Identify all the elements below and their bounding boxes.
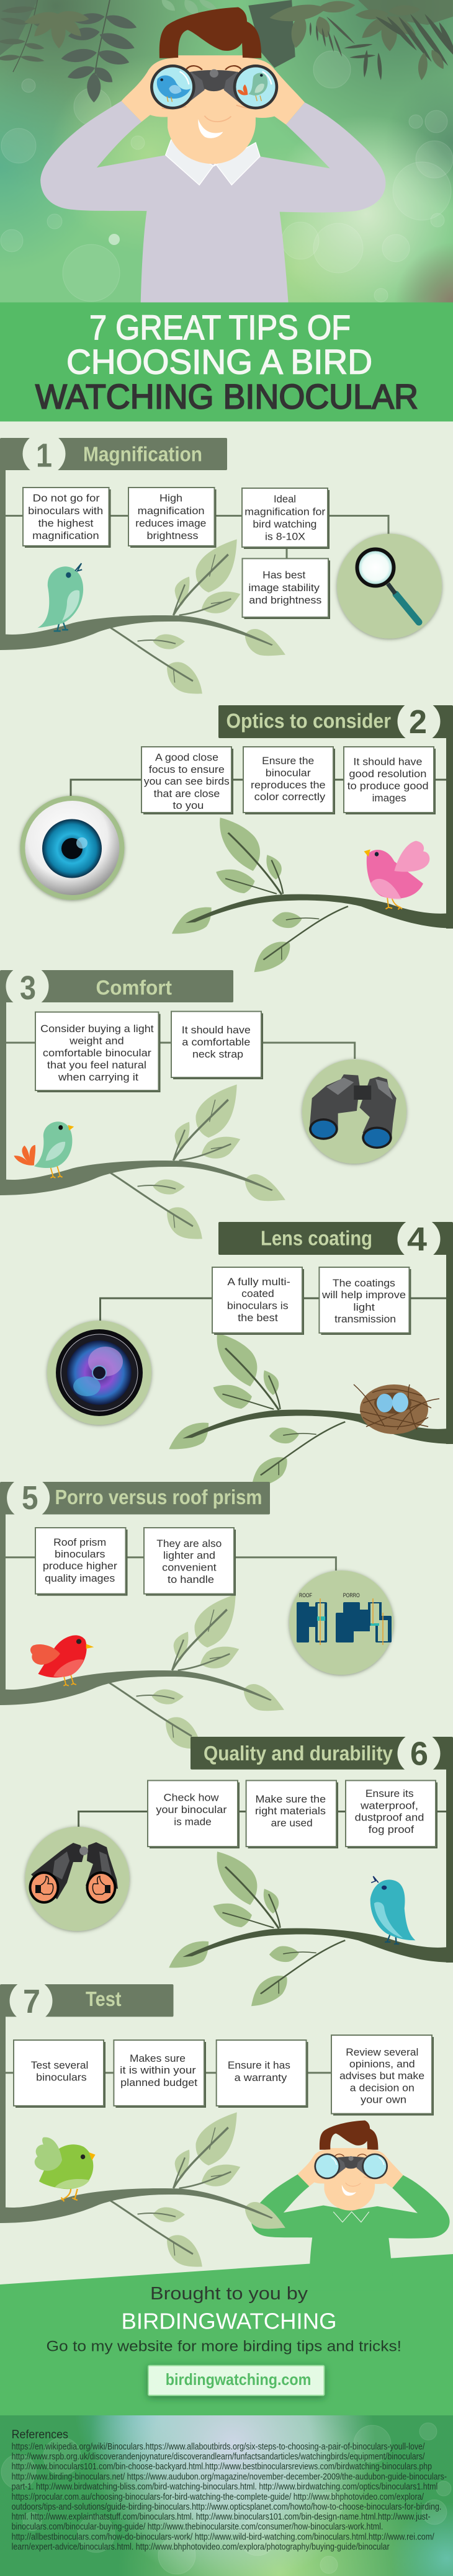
section 1: magnification — [0, 432, 442, 693]
tip box: ideal magnification: is 8-10X — [265, 530, 305, 542]
tip box: highest magnification: binoculars with — [28, 505, 103, 517]
tip box: materials: Make sure the — [256, 1793, 326, 1805]
branch with leaves — [0, 1084, 285, 1239]
section 5 heading — [0, 1476, 270, 1695]
small birdwatcher in green sweater — [251, 2120, 450, 2290]
tip box: opinions: advises but make — [339, 2070, 424, 2082]
section 5 heading: Porro versus roof prism — [55, 1486, 262, 1509]
tip box: roof prism: produce higher — [43, 1560, 117, 1572]
tip box: warranty: Ensure it has — [228, 2059, 290, 2071]
tip box: waterproof: fog proof — [369, 1824, 414, 1835]
tip box: resolution: to produce good — [348, 780, 429, 791]
section 7 heading: Test — [86, 1987, 122, 2010]
section 6 heading: Quality and durability — [204, 1742, 393, 1765]
icon: binoculars with thumbs up — [25, 1827, 129, 1931]
tip box: test several — [14, 2040, 105, 2108]
icon: teal bird — [370, 1876, 415, 1945]
tip box: highest magnification: the highest — [38, 517, 94, 529]
icon: mint bird — [38, 563, 83, 631]
section 4 heading — [218, 1218, 453, 1444]
references panel: learn/expert-advice/binoculars.html. http://www.bhphotovideo.com/explora/photography/buying-guide/binocular — [12, 2543, 390, 2552]
tip box: multi-coated: the best — [238, 1312, 278, 1324]
section 7 heading: 7 — [23, 1983, 40, 2020]
tip box: colour reproduction: Ensure the — [262, 755, 314, 767]
section 1 heading: 1 — [36, 437, 52, 474]
tip box: opinions — [331, 2035, 434, 2116]
references panel: binoculars.com/binocular-buying-guide/ http://www.thebinocularsite.com/consumer/how-binoculars-work.html. — [12, 2522, 383, 2532]
icon: roof and porro prism diagram: PORRO — [343, 1592, 360, 1598]
section 5 heading: 5 — [22, 1479, 38, 1517]
section 1 heading — [0, 432, 227, 642]
tip box: stability: image stability — [248, 582, 320, 594]
tip box: ideal magnification: bird watching — [253, 519, 316, 530]
icon: magnifying glass — [337, 533, 442, 639]
tip box: how it is made: your binocular — [156, 1804, 227, 1816]
tip box: waterproof — [346, 1780, 437, 1848]
references panel: References — [12, 2428, 68, 2441]
footer text: brought to you by: Brought to you by — [150, 2284, 308, 2304]
section 5 connectors — [6, 1558, 336, 1571]
footer text: brought to you by: BIRDINGWATCHING — [122, 2309, 336, 2333]
tip box: light weight: Consider buying a light — [40, 1023, 154, 1035]
footer text: brought to you by: Go to my website for more birding tips and tricks! — [46, 2338, 401, 2355]
tip box: close focus: A good close — [155, 752, 218, 763]
tip box: stability — [242, 558, 330, 619]
icon: green bird with orange tail — [14, 1121, 74, 1178]
section 1 heading: Magnification — [83, 442, 202, 465]
tip box: waterproof: Ensure its — [366, 1788, 414, 1799]
tip box: neck strap: It should have — [182, 1024, 251, 1036]
tip box: close focus: to you — [173, 800, 204, 811]
section 1 connectors — [6, 516, 388, 558]
tip box: lighter: They are also — [156, 1538, 222, 1549]
tip box: how it is made: is made — [174, 1816, 212, 1827]
branch with leaves — [0, 539, 285, 693]
footer green band — [0, 2254, 453, 2415]
section 2 heading — [218, 700, 453, 929]
icon: roof and porro prism diagram — [289, 1571, 393, 1675]
icon: lime bird — [35, 2137, 96, 2201]
tip box: neck strap: neck strap — [192, 1048, 243, 1060]
branch with leaves — [169, 1333, 450, 1487]
tip box: lighter: to handle — [168, 1574, 214, 1585]
tip box: opinions: Review several — [346, 2046, 418, 2058]
section 6 connectors — [79, 1811, 446, 1827]
tip box: image brightness: reduces image — [135, 517, 206, 529]
tip box: light transmission — [319, 1267, 411, 1335]
tip box: budget: planned budget — [120, 2077, 197, 2088]
tip box: image brightness: High — [159, 492, 182, 504]
section 2 heading: Optics to consider — [226, 710, 391, 732]
tip box: waterproof: waterproof, — [360, 1800, 418, 1811]
tip box: light transmission: The coatings — [333, 1277, 395, 1289]
tip box: budget: Makes sure — [130, 2052, 186, 2064]
hero illustration: birdwatcher with binoculars — [0, 0, 453, 303]
section 6 heading: 6 — [410, 1736, 428, 1773]
tip box: close focus: focus to ensure — [149, 764, 225, 775]
tip box: ideal magnification — [242, 488, 330, 549]
section 2 heading: 2 — [409, 703, 427, 741]
tip box: opinions: a decision on — [350, 2082, 415, 2094]
tip box: opinions: opinions, and — [349, 2058, 415, 2070]
tip box: light weight: that you feel natural — [47, 1059, 146, 1071]
section 4: lens coating — [47, 1218, 453, 1487]
tip box: highest magnification: Do not go for — [33, 492, 100, 504]
tip box: neck strap: a comfortable — [182, 1036, 250, 1048]
section 5: porro versus roof prism — [0, 1476, 393, 1749]
tip box: light transmission: light — [353, 1301, 375, 1313]
tip box: test several: binoculars — [36, 2071, 87, 2083]
tip box: multi-coated: binoculars is — [227, 1300, 289, 1312]
tip box: multi-coated — [212, 1267, 304, 1335]
branch with leaves — [0, 1594, 284, 1749]
website button: birdingwatching.com — [166, 2370, 311, 2389]
tip box: light weight: weight and — [69, 1035, 124, 1047]
section 6: quality and durability — [25, 1732, 453, 2006]
tip box: close focus — [141, 747, 233, 814]
tip box: light weight: when carrying it — [58, 1071, 138, 1083]
tip box: lighter: lighter and — [163, 1549, 215, 1561]
title banner: 7 GREAT TIPS OF — [89, 308, 351, 347]
section 4 heading: 4 — [407, 1221, 427, 1258]
branch with leaves — [172, 818, 453, 972]
tip box: test several: Test several — [31, 2059, 88, 2071]
tip box: close focus: you can see birds — [144, 775, 230, 787]
section 7 heading — [0, 1979, 174, 2209]
tip box: warranty: a warranty — [235, 2072, 287, 2084]
tip box: light transmission: will help improve — [321, 1289, 406, 1301]
title banner: CHOOSING A BIRD — [66, 342, 372, 381]
tip box: image brightness — [128, 488, 216, 548]
icon: binoculars — [302, 1059, 406, 1164]
icon: eye — [20, 796, 124, 900]
tip box: light weight: comfortable binocular — [43, 1047, 151, 1059]
tip box: materials: right materials — [255, 1805, 326, 1817]
tip box: materials: are used — [271, 1817, 313, 1829]
tip box: colour reproduction: binocular — [266, 767, 311, 779]
tip box: highest magnification — [23, 488, 110, 548]
tip box: resolution: It should have — [353, 756, 422, 768]
tip box: opinions: your own — [361, 2094, 406, 2106]
references panel — [0, 2415, 453, 2576]
section 2 connectors — [71, 780, 446, 796]
tip box: how it is made: Check how — [164, 1792, 219, 1804]
tip box: multi-coated: coated — [241, 1288, 274, 1299]
footer text: brought to you by — [46, 2284, 401, 2355]
section 6 heading — [191, 1732, 453, 1963]
tip box: highest magnification: magnification — [32, 530, 99, 541]
tip box: roof prism: Roof prism — [53, 1536, 106, 1548]
website button — [148, 2366, 324, 2396]
tip box: colour reproduction: reproduces the — [251, 779, 326, 791]
tip box: stability: and brightness — [249, 594, 321, 606]
tip box: neck strap — [171, 1012, 263, 1079]
tip box: budget: it is within your — [120, 2064, 196, 2076]
title banner — [0, 303, 453, 422]
tip box: light transmission: transmission — [334, 1313, 396, 1325]
icon: roof and porro prism diagram: ROOF — [299, 1592, 312, 1598]
tip box: colour reproduction — [243, 747, 335, 814]
tip box: how it is made — [148, 1780, 240, 1848]
section 7: test — [0, 1979, 434, 2266]
tip box: lighter: convenient — [162, 1562, 217, 1574]
tip box: warranty — [217, 2040, 308, 2108]
section 4 heading: Lens coating — [261, 1227, 372, 1250]
tip box: multi-coated: A fully multi- — [227, 1276, 290, 1288]
tip box: stability: Has best — [262, 569, 305, 581]
tip box: waterproof: dustproof and — [355, 1812, 424, 1824]
tip box: light weight — [35, 1012, 160, 1092]
tip box: lighter — [144, 1528, 236, 1596]
tip box: budget — [114, 2040, 206, 2108]
section 7 connectors — [6, 2072, 331, 2074]
icon: pink bird — [364, 841, 429, 909]
tip box: roof prism — [35, 1528, 128, 1596]
tip box: roof prism: binoculars — [55, 1548, 105, 1560]
tip box: resolution: good resolution — [349, 768, 426, 780]
branch with leaves — [169, 1852, 450, 2006]
section 2: optics — [20, 700, 453, 972]
branch with leaves — [0, 2112, 285, 2266]
section 3 heading — [0, 965, 233, 1186]
tip box: ideal magnification: Ideal — [274, 493, 296, 505]
tip box: image brightness: brightness — [146, 530, 199, 541]
section 3 heading: 3 — [20, 969, 36, 1007]
icon: nest with blue eggs — [354, 1384, 439, 1434]
tip box: resolution — [344, 747, 436, 814]
tip box: roof prism: quality images — [45, 1572, 115, 1584]
tip box: close focus: that are close — [154, 788, 220, 800]
tip box: ideal magnification: magnification for — [244, 506, 326, 518]
section 3 heading: Comfort — [96, 976, 172, 999]
icon: red bird — [30, 1635, 94, 1686]
tip box: colour reproduction: color correctly — [254, 791, 326, 803]
tip box: image brightness: magnification — [138, 505, 205, 517]
section 4 connectors — [101, 1298, 446, 1321]
title banner: WATCHING BINOCULAR — [35, 377, 418, 416]
section 3 connectors — [6, 1043, 355, 1059]
tip box: materials — [246, 1780, 338, 1848]
section 3: comfort — [0, 965, 406, 1239]
icon: camera lens — [47, 1321, 151, 1425]
tip box: resolution: images — [372, 792, 406, 804]
